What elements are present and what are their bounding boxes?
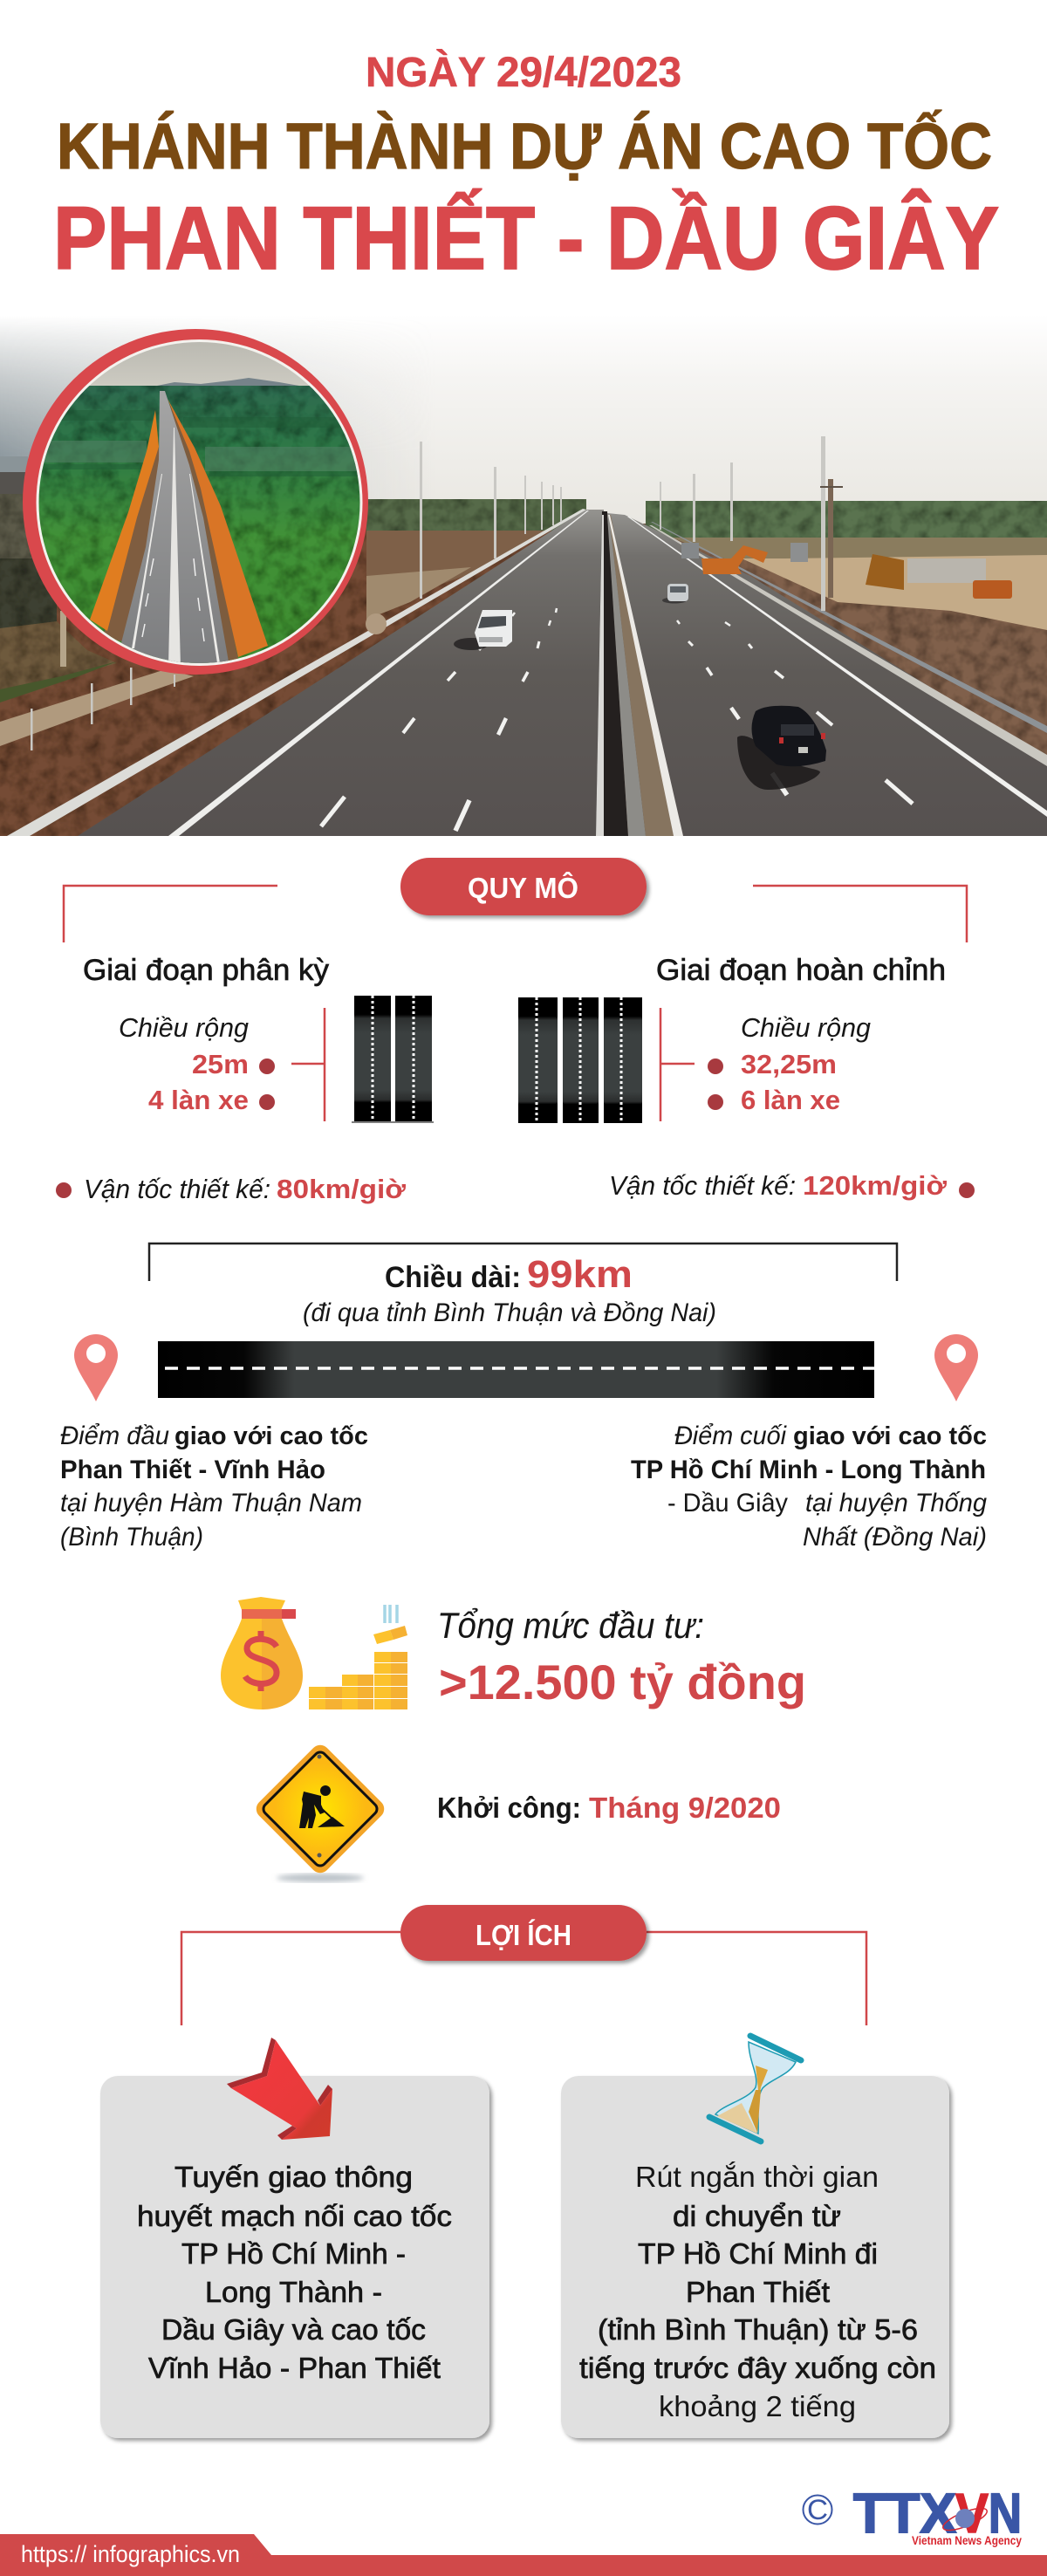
car white [454, 610, 512, 650]
start point text [60, 1422, 368, 1552]
right verge [166, 397, 239, 672]
heading: Giai đoạn phân kỳ [83, 954, 329, 987]
length value: 99km [527, 1253, 633, 1296]
road lines [168, 510, 589, 836]
design speed left: Vận tốc thiết kế: [84, 1174, 270, 1204]
provinces note: (đi qua tỉnh Bình Thuận và Đồng Nai) [303, 1298, 716, 1327]
road diagram 4 lanes [352, 996, 434, 1122]
icon: construction sign [252, 1741, 388, 1882]
start point text: giao với cao tốc [174, 1422, 368, 1450]
title [53, 49, 999, 288]
hero photo illustration: expressway [0, 314, 1047, 836]
icon: start pin [74, 1334, 118, 1401]
benefit text: tiếng trước đây xuống còn [579, 2352, 936, 2384]
width label: Chiều rộng [741, 1012, 871, 1043]
right kerb and guardrail [649, 525, 1047, 766]
ground right [611, 524, 1047, 836]
wordmark: TTX [853, 2482, 956, 2545]
concrete pipe [366, 613, 387, 634]
start date text: Khởi công: [437, 1792, 581, 1824]
icon: hourglass [709, 2036, 801, 2141]
forest [35, 386, 366, 667]
logo: TTXVN: V [955, 2482, 989, 2545]
benefit text: huyết mạch nối cao tốc [137, 2200, 452, 2232]
forest bands [44, 441, 362, 471]
end point text: Nhất (Đồng Nai) [803, 1523, 987, 1552]
icon: money bag and coins [221, 1597, 407, 1709]
source url: https:// infographics.vn [21, 2541, 240, 2567]
globe [941, 2504, 989, 2535]
start point text: Điểm đầu [60, 1422, 169, 1450]
corner brackets [64, 886, 277, 942]
panel: giai đoạn hoàn chỉnh [518, 954, 946, 1123]
branch lines [181, 1932, 400, 2025]
start point text: (Bình Thuận) [60, 1523, 203, 1552]
start date text: Tháng 9/2020 [589, 1792, 781, 1824]
total investment text: Tổng mức đầu tư: [437, 1605, 704, 1646]
end point text: Điểm cuối [674, 1422, 787, 1450]
design speed right: 120km/giờ [803, 1170, 948, 1201]
benefit text: Phan Thiết [686, 2276, 830, 2308]
heading: Giai đoạn hoàn chỉnh [656, 954, 946, 987]
pill [400, 1905, 647, 1961]
lanes value: 6 làn xe [741, 1085, 840, 1115]
tree line left [366, 499, 586, 531]
road diagram 6 lanes [518, 997, 642, 1123]
benefit text [579, 2161, 936, 2422]
asphalt [115, 391, 229, 667]
benefit text: Vĩnh Hảo - Phan Thiết [148, 2352, 441, 2384]
benefit text: Tuyến giao thông [174, 2161, 413, 2193]
copyright mark [803, 2496, 832, 2524]
logo: TTXVN: C [807, 2494, 828, 2525]
icon: red arrow [227, 2038, 332, 2140]
icon: end pin [934, 1334, 978, 1401]
benefit text: Rút ngắn thời gian [635, 2161, 879, 2193]
logo: TTXVN [803, 2482, 1022, 2547]
date line: NGÀY 29/4/2023 [366, 49, 681, 96]
section header: quy mô [64, 858, 967, 942]
bracket [149, 1243, 897, 1281]
footer bar [0, 2534, 1047, 2576]
section header: quy mô: QUY MÔ [468, 871, 578, 904]
benefit text: di chuyển từ [673, 2200, 841, 2232]
tree line right [646, 501, 1047, 538]
pill [400, 858, 647, 915]
left orange shoulder [90, 410, 159, 631]
inset sky [87, 342, 311, 387]
end point text: giao với cao tốc [793, 1422, 987, 1450]
benefit text [137, 2161, 452, 2384]
start point text: tại huyện Hàm Thuận Nam [60, 1489, 362, 1518]
benefit text: (tỉnh Bình Thuận) từ 5-6 [598, 2313, 918, 2346]
design speed right: Vận tốc thiết kế: [609, 1170, 796, 1201]
length section [74, 1243, 978, 1401]
left verge [103, 445, 162, 641]
design speed left: 80km/giờ [277, 1174, 407, 1204]
car silver [662, 584, 688, 604]
bag [238, 1597, 285, 1610]
benefit text: Dầu Giây và cao tốc [161, 2313, 426, 2346]
width value: 32,25m [741, 1049, 837, 1079]
mountains [157, 378, 314, 393]
design speed right [609, 1170, 975, 1201]
end point text: tại huyện Thống [805, 1489, 987, 1518]
benefit text: Long Thành - [205, 2276, 382, 2308]
agency name: Vietnam News Agency [912, 2533, 1022, 2547]
length label: Chiều dài: [385, 1261, 521, 1294]
median [596, 511, 628, 836]
poles [31, 436, 825, 750]
panel: benefit 1 [100, 2038, 489, 2438]
left guardrail [7, 509, 586, 836]
end point text [631, 1422, 987, 1552]
lanes value: 4 làn xe [148, 1085, 249, 1115]
benefit text: TP Hồ Chí Minh đi [638, 2237, 878, 2270]
left carriageway [78, 510, 604, 836]
right orange shoulder [168, 399, 268, 657]
coins [309, 1652, 391, 1709]
lane dashes [321, 608, 913, 831]
road strip [158, 1341, 874, 1398]
design speed left [56, 1174, 407, 1204]
bracket connector [291, 1008, 325, 1121]
width value: 25m [192, 1049, 249, 1079]
lane lines [132, 474, 162, 648]
construction vehicles [681, 543, 1012, 599]
right carriageway [607, 513, 1047, 836]
start date text [437, 1792, 781, 1824]
total investment text: >12.500 tỷ đồng [439, 1655, 806, 1709]
total investment text [437, 1605, 806, 1709]
ground left [0, 524, 611, 836]
panel: giai đoạn phân kỳ [83, 954, 434, 1122]
bracket connector [660, 1008, 695, 1121]
start point text: Phan Thiết - Vĩnh Hảo [60, 1456, 325, 1484]
benefit text: TP Hồ Chí Minh - [181, 2237, 406, 2270]
car black [737, 706, 826, 790]
inset circle photo [23, 329, 368, 675]
benefit text: khoảng 2 tiếng [659, 2390, 856, 2422]
section header: lợi ích [181, 1905, 866, 2025]
end point text: - Dầu Giây [667, 1489, 788, 1518]
logo: TTXVN: N [989, 2482, 1022, 2545]
width label: Chiều rộng [119, 1012, 249, 1043]
end point text: TP Hồ Chí Minh - Long Thành [631, 1456, 986, 1484]
section header: lợi ích: LỢI ÍCH [476, 1919, 571, 1951]
panel: benefit 2 [561, 2036, 949, 2438]
